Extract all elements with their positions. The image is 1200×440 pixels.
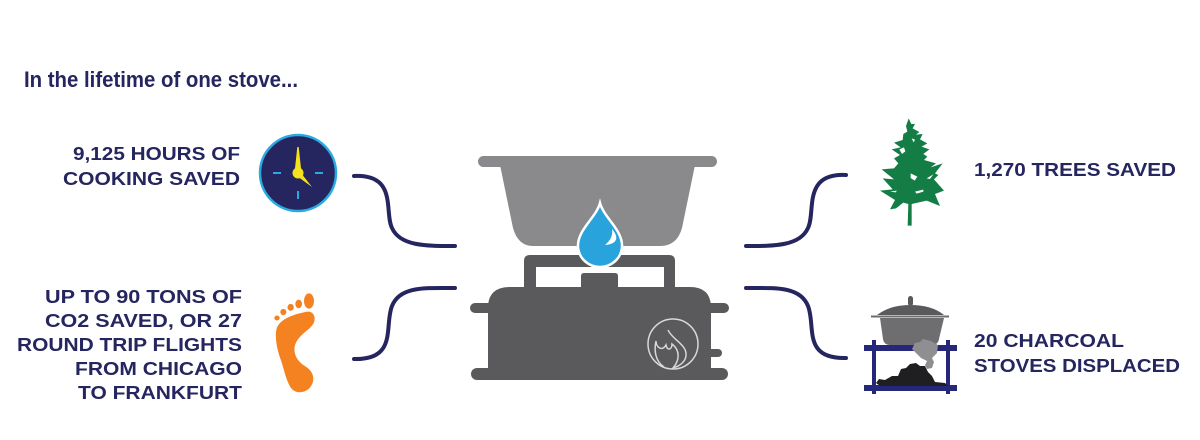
smoke bbox=[912, 339, 938, 369]
text block: charcoal stoves displaced: STOVES DISPLACED bbox=[974, 355, 1180, 376]
connector: charcoal to stove bbox=[746, 288, 846, 358]
charcoal heap bbox=[876, 363, 948, 386]
central illustration: stove with pot bbox=[470, 156, 729, 380]
text block: charcoal stoves displaced bbox=[974, 330, 1180, 376]
pot on charcoal stove bbox=[871, 296, 949, 345]
icon: orange footprint bbox=[274, 293, 315, 392]
connector: clock to stove bbox=[354, 176, 455, 246]
title: In the lifetime of one stove... bbox=[24, 67, 298, 92]
connector: tree to stove bbox=[746, 175, 846, 246]
text block: cooking hours saved: COOKING SAVED bbox=[63, 168, 240, 189]
text block: CO2 saved bbox=[17, 286, 243, 403]
text block: cooking hours saved: 9,125 HOURS OF bbox=[73, 143, 240, 164]
stove body bbox=[488, 287, 711, 380]
blue flame bbox=[578, 203, 622, 267]
icon: pine tree bbox=[880, 118, 944, 226]
text block: CO2 saved: FROM CHICAGO bbox=[75, 358, 242, 379]
burner head bbox=[581, 273, 618, 290]
connector: footprint to stove bbox=[354, 288, 455, 359]
pot bbox=[478, 156, 717, 246]
shelf rack bbox=[864, 340, 957, 394]
text block: trees saved: 1,270 TREES SAVED bbox=[974, 159, 1176, 180]
flame logo on stove bbox=[648, 319, 698, 369]
text block: CO2 saved: UP TO 90 TONS OF bbox=[45, 286, 242, 307]
icon: charcoal stove bbox=[864, 296, 957, 394]
text block: charcoal stoves displaced: 20 CHARCOAL bbox=[974, 330, 1124, 351]
stove handles and base bbox=[470, 303, 729, 380]
burner frame bbox=[524, 255, 675, 290]
icon: clock bbox=[260, 135, 336, 211]
text block: cooking hours saved bbox=[63, 143, 240, 189]
text block: CO2 saved: TO FRANKFURT bbox=[78, 382, 243, 403]
text block: CO2 saved: CO2 SAVED, OR 27 bbox=[45, 310, 242, 331]
text block: CO2 saved: ROUND TRIP FLIGHTS bbox=[17, 334, 242, 355]
